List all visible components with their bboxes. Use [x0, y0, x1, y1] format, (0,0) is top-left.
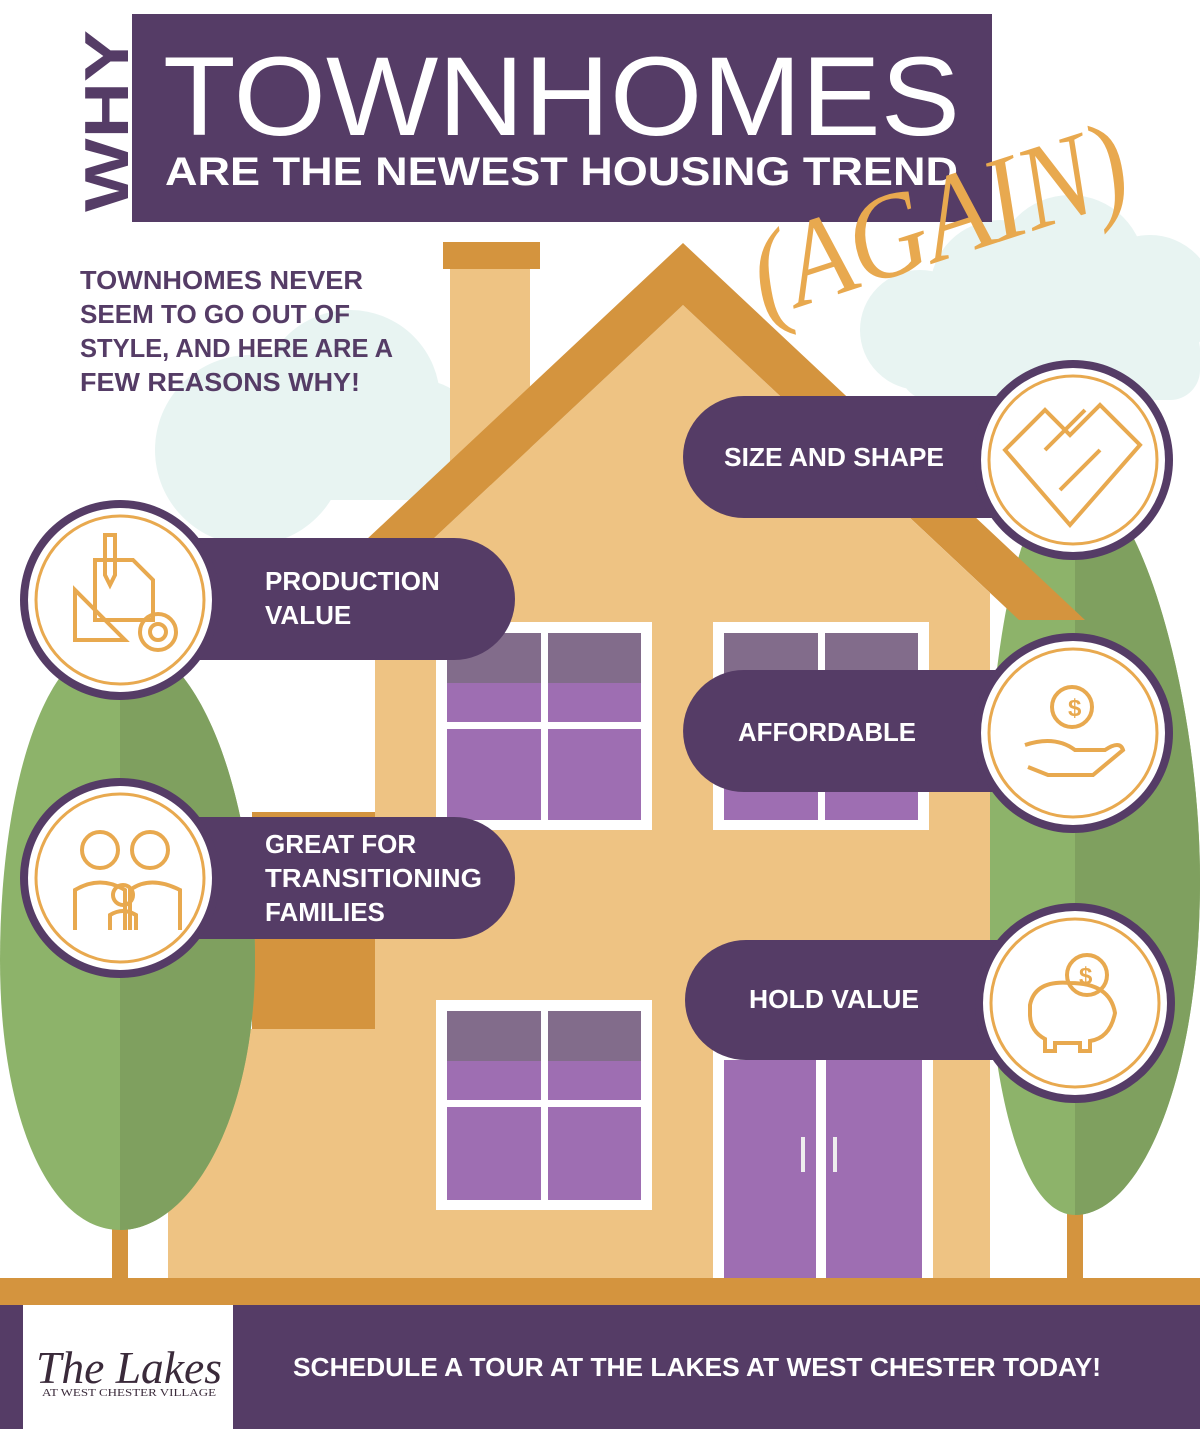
TOWNHOMES: TOWNHOMES	[163, 34, 960, 159]
pill: hold value: $	[1079, 963, 1093, 990]
logo	[23, 1305, 233, 1429]
pill: size and shape	[683, 360, 1173, 560]
window: upper right	[713, 622, 929, 830]
door	[713, 1050, 933, 1280]
pill: transitioning families	[20, 778, 515, 978]
intro text: TOWNHOMES NEVER	[80, 265, 363, 295]
subtitle: ARE THE NEWEST HOUSING TREND	[165, 150, 958, 194]
logo: AT WEST CHESTER VILLAGE	[42, 1388, 216, 1399]
pill: size and shape: SIZE AND SHAPE	[724, 442, 944, 472]
icon: drafting	[75, 535, 176, 650]
window: upper left	[436, 622, 652, 830]
tree: right	[985, 480, 1200, 1280]
footer	[0, 1305, 1200, 1429]
pill: production value: PRODUCTION	[265, 566, 440, 596]
logo: The Lakes	[36, 1342, 222, 1393]
window: lower left	[436, 1000, 652, 1210]
icon: family	[75, 832, 180, 930]
WHY vertical: WHY	[73, 30, 142, 212]
chimney	[443, 242, 540, 485]
tree: left	[0, 640, 255, 1280]
AGAIN handwritten: (AGAIN)	[732, 96, 1144, 343]
pill: production value: VALUE	[265, 600, 351, 630]
icon: hand with coin	[1025, 687, 1123, 775]
title banner	[73, 14, 992, 222]
intro text: SEEM TO GO OUT OF	[80, 299, 350, 329]
pill: hold value: HOLD VALUE	[749, 984, 919, 1014]
icon: piggy bank	[1030, 955, 1115, 1051]
clouds	[155, 195, 1200, 545]
pill: affordable: $	[1068, 695, 1082, 722]
pill: affordable: AFFORDABLE	[738, 717, 916, 747]
pill: production value	[20, 500, 515, 700]
ground	[0, 1278, 1200, 1306]
intro text: FEW REASONS WHY!	[80, 367, 360, 397]
pill: transitioning families: FAMILIES	[265, 897, 385, 927]
icon: floor plan	[1005, 405, 1140, 525]
intro text: STYLE, AND HERE ARE A	[80, 333, 393, 363]
pill: hold value	[685, 903, 1175, 1103]
cta: SCHEDULE A TOUR AT THE LAKES AT WEST CHESTER TODAY!	[293, 1352, 1101, 1382]
house	[168, 243, 1085, 1280]
pill: transitioning families: GREAT FOR	[265, 829, 416, 859]
pill: affordable	[683, 633, 1173, 833]
intro text	[80, 265, 393, 397]
pill: transitioning families: TRANSITIONING	[265, 863, 482, 893]
